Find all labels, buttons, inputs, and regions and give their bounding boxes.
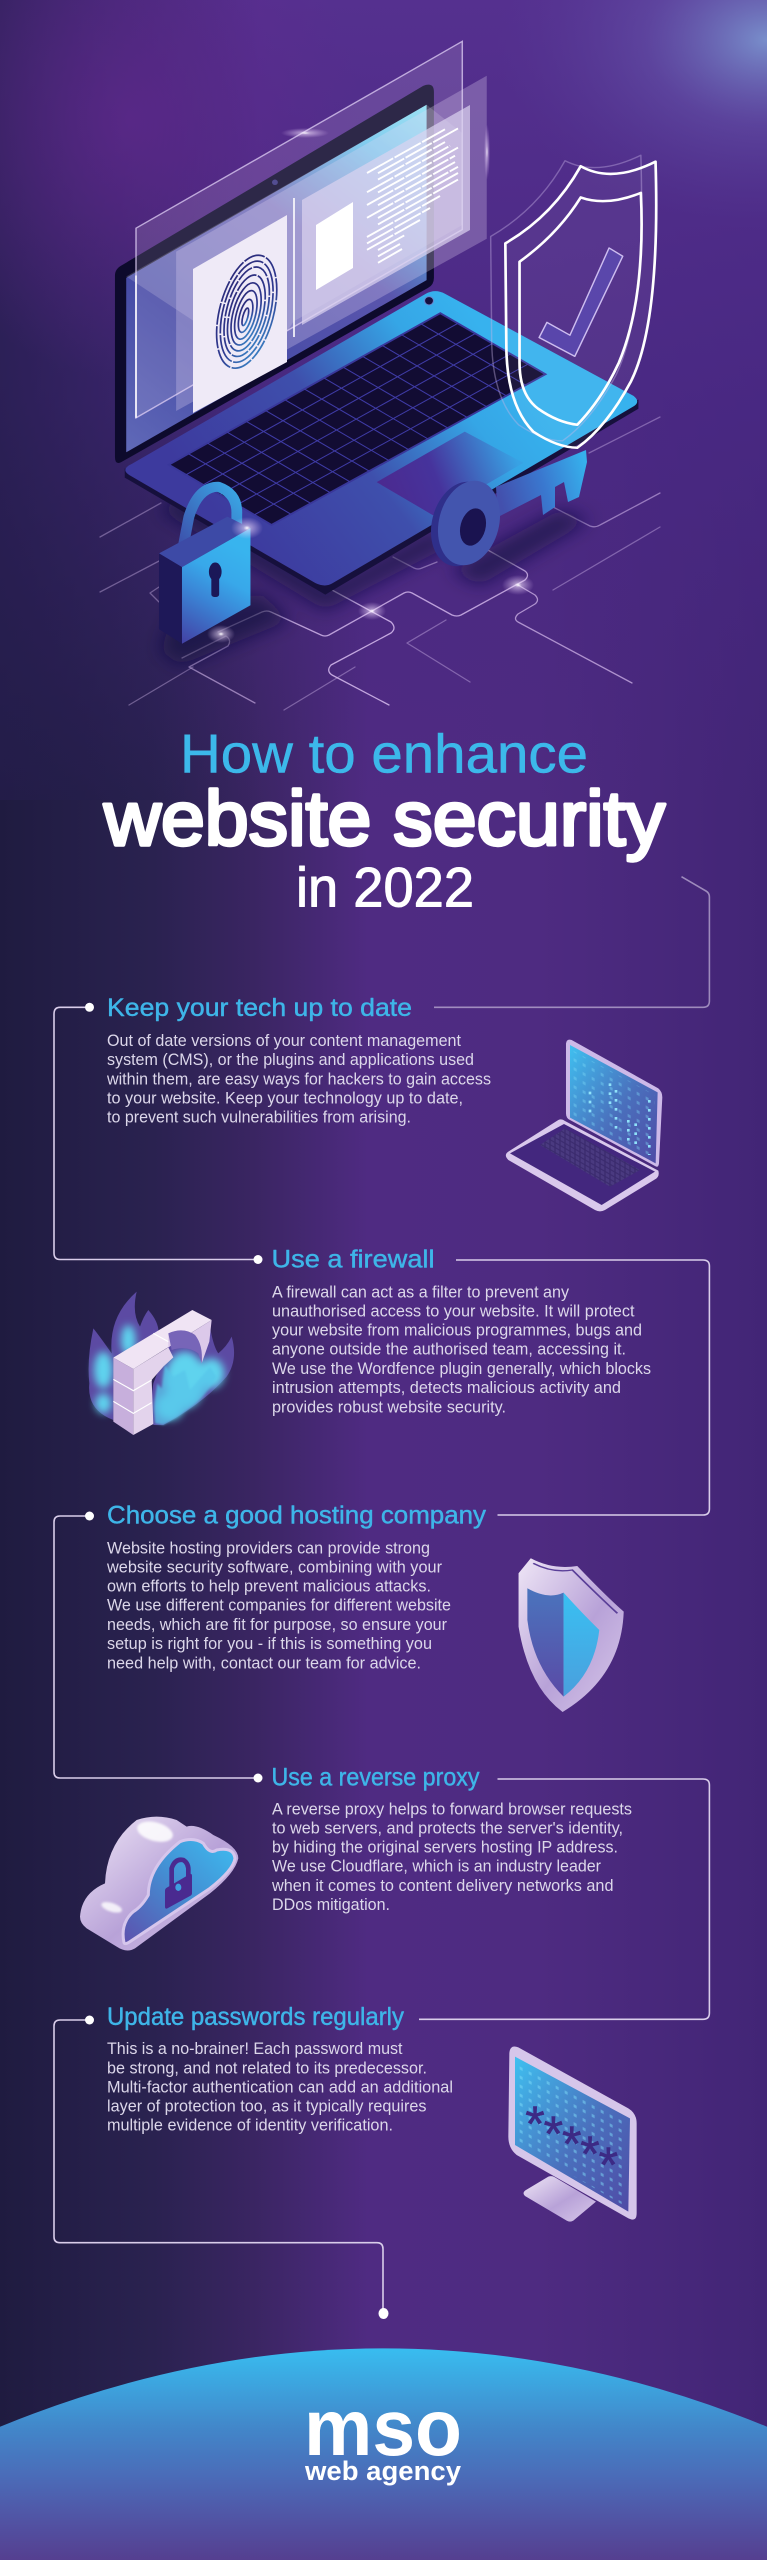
body text: system (CMS), or the plugins and applications used [107,1051,474,1069]
body text: Website hosting providers can provide strong [107,1539,430,1557]
heading: Use a reverse proxy [272,1764,480,1792]
footer panel [0,2348,767,2560]
section: use a firewall [272,1246,651,1416]
password asterisks: * [599,2137,618,2193]
check mark [539,248,623,356]
icon: cloud with padlock [80,1817,238,1950]
document card [294,105,470,337]
body text [106,1032,491,1127]
body text [106,1539,451,1672]
heading: Use a firewall [272,1246,434,1274]
body text: provides robust website security. [272,1398,506,1416]
heading: Update passwords regularly [107,2003,404,2031]
body text: website security software, combining with your [106,1558,442,1576]
security shield [491,155,656,448]
body text: multiple evidence of identity verification. [107,2117,393,2135]
connector: step 1 to step 2 [54,1003,262,1264]
laptop screen [115,85,434,463]
body text: This is a no-brainer! Each password must [107,2040,403,2058]
body text: to your website. Keep your technology up to date, [107,1089,463,1107]
body text: be strong, and not related to its predecessor. [107,2059,427,2077]
key [422,450,587,573]
body text: to web servers, and protects the server's identity, [272,1819,623,1837]
connector: step 2 to step 3 [456,1260,709,1515]
connector: title to step 1 [434,877,709,1007]
body text: Out of date versions of your content management [107,1032,461,1050]
password asterisks: * [562,2116,581,2172]
icon: laptop [506,1040,662,1211]
body text: Multi-factor authentication can add an additional [107,2078,453,2096]
body text: your website from malicious programmes, bugs and [272,1322,642,1340]
logo: mso [304,2383,462,2472]
hero illustration: laptop, shield, padlock and key [100,41,660,710]
body text: within them, are easy ways for hackers to gain access [106,1070,491,1088]
section: use a reverse proxy [271,1764,632,1914]
connector: step 4 to step 5 [419,1779,709,2019]
body text [107,2040,453,2135]
title: in 2022 [296,856,474,919]
connector: step 5 to footer [54,2016,388,2319]
body text: anyone outside the authorised team, accessing it. [272,1341,626,1359]
icon: shield [519,1558,624,1712]
title: website security [103,776,666,862]
logo: web agency [304,2456,461,2486]
connector: step 3 to step 4 [54,1512,262,1782]
keyboard [169,313,545,525]
body text: A reverse proxy helps to forward browser requests [272,1800,632,1818]
circuit lines [100,417,660,710]
password asterisks: * [580,2126,600,2182]
title [103,723,666,919]
body text: setup is right for you - if this is something you [107,1635,432,1653]
sparkles [207,124,534,643]
password asterisks: * [525,2096,545,2152]
body text: layer of protection too, as it typically requires [107,2098,426,2116]
shadows [160,495,590,665]
body text: need help with, contact our team for advice. [107,1654,421,1672]
body text: by hiding the original servers hosting IP address. [272,1839,618,1857]
body text: A firewall can act as a filter to prevent any [272,1283,570,1301]
section: update passwords regularly [107,2003,453,2135]
body text: We use the Wordfence plugin generally, which blocks [272,1360,651,1378]
padlock [159,487,250,644]
touchpad [377,432,523,515]
icon: monitor with password [508,2046,637,2222]
section: keep your tech up to date [106,994,491,1127]
body text: when it comes to content delivery networks and [271,1877,614,1895]
icon: burning firewall [89,1292,234,1435]
body text: to prevent such vulnerabilities from arising. [107,1109,411,1127]
body text: We use different companies for different website [107,1597,451,1615]
password asterisks [525,2096,618,2193]
body text: DDos mitigation. [272,1896,390,1914]
heading: Choose a good hosting company [107,1501,487,1529]
body text: We use Cloudflare, which is an industry leader [272,1858,601,1876]
body text: intrusion attempts, detects malicious activity and [272,1379,621,1397]
body text: needs, which are fit for purpose, so ensure your [107,1616,447,1634]
body text [272,1283,651,1416]
body text: own efforts to help prevent malicious attacks. [107,1578,431,1596]
translucent planes [126,41,487,418]
heading: Keep your tech up to date [107,994,412,1022]
password asterisks: * [544,2106,563,2162]
section: choose a good hosting company [106,1501,487,1672]
body text [271,1800,632,1914]
fingerprint card [193,215,288,413]
body text: unauthorised access to your website. It will protect [272,1302,635,1320]
title: How to enhance [180,723,588,785]
laptop base [125,291,638,595]
